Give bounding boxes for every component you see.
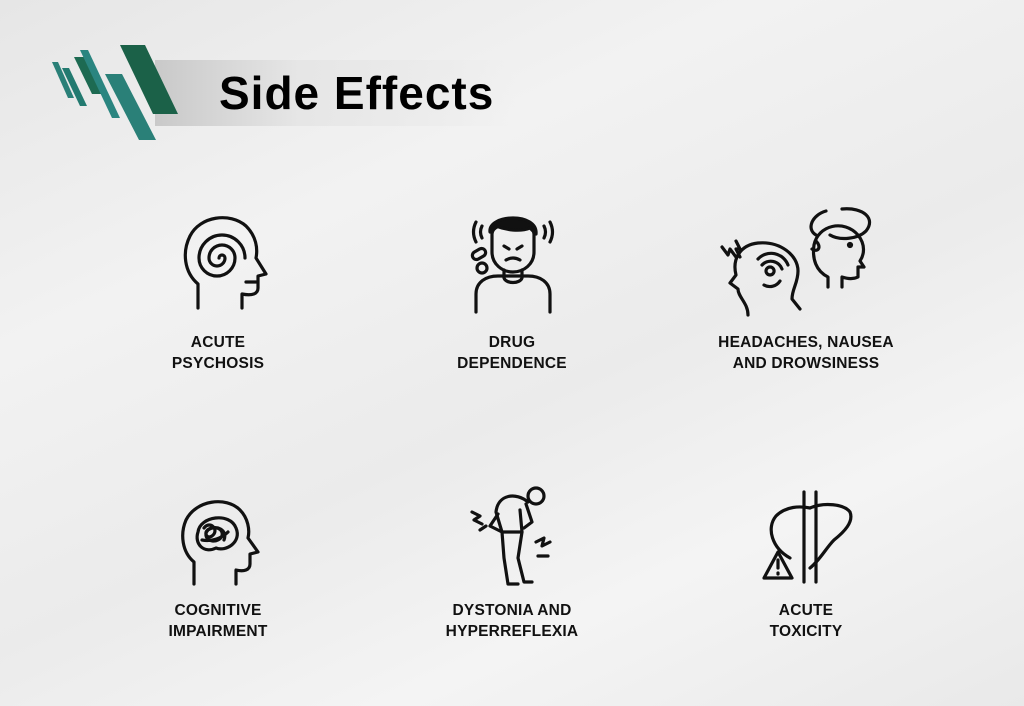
icon: dystonia: [470, 486, 552, 586]
label: acute toxicity: TOXICITY: [770, 623, 842, 640]
label: drug dependence: DEPENDENCE: [457, 355, 567, 372]
icon: drug dependence: [470, 216, 554, 314]
label: acute psychosis: ACUTE: [191, 334, 245, 351]
logo: [52, 45, 178, 140]
label: acute toxicity: [770, 602, 842, 640]
label: headaches: [718, 334, 894, 372]
label: acute toxicity: ACUTE: [779, 602, 833, 619]
header band: [155, 60, 515, 126]
label: cognitive impairment: COGNITIVE: [174, 602, 262, 619]
label: acute psychosis: [172, 334, 264, 372]
label: dystonia: DYSTONIA AND: [453, 602, 571, 619]
icon: acute toxicity: [762, 490, 852, 584]
icon: acute psychosis: [184, 216, 268, 310]
label: dystonia: HYPERREFLEXIA: [446, 623, 578, 640]
title: Side Effects: [219, 67, 494, 119]
label: acute psychosis: PSYCHOSIS: [172, 355, 264, 372]
label: headaches: AND DROWSINESS: [733, 355, 879, 372]
label: cognitive impairment: [168, 602, 268, 640]
label: drug dependence: DRUG: [489, 334, 535, 351]
label: cognitive impairment: IMPAIRMENT: [168, 623, 268, 640]
label: drug dependence: [457, 334, 567, 372]
icon: headaches: [720, 207, 872, 317]
label: dystonia: [446, 602, 578, 640]
icon: cognitive impairment: [181, 500, 260, 586]
label: headaches: HEADACHES, NAUSEA: [718, 334, 894, 351]
